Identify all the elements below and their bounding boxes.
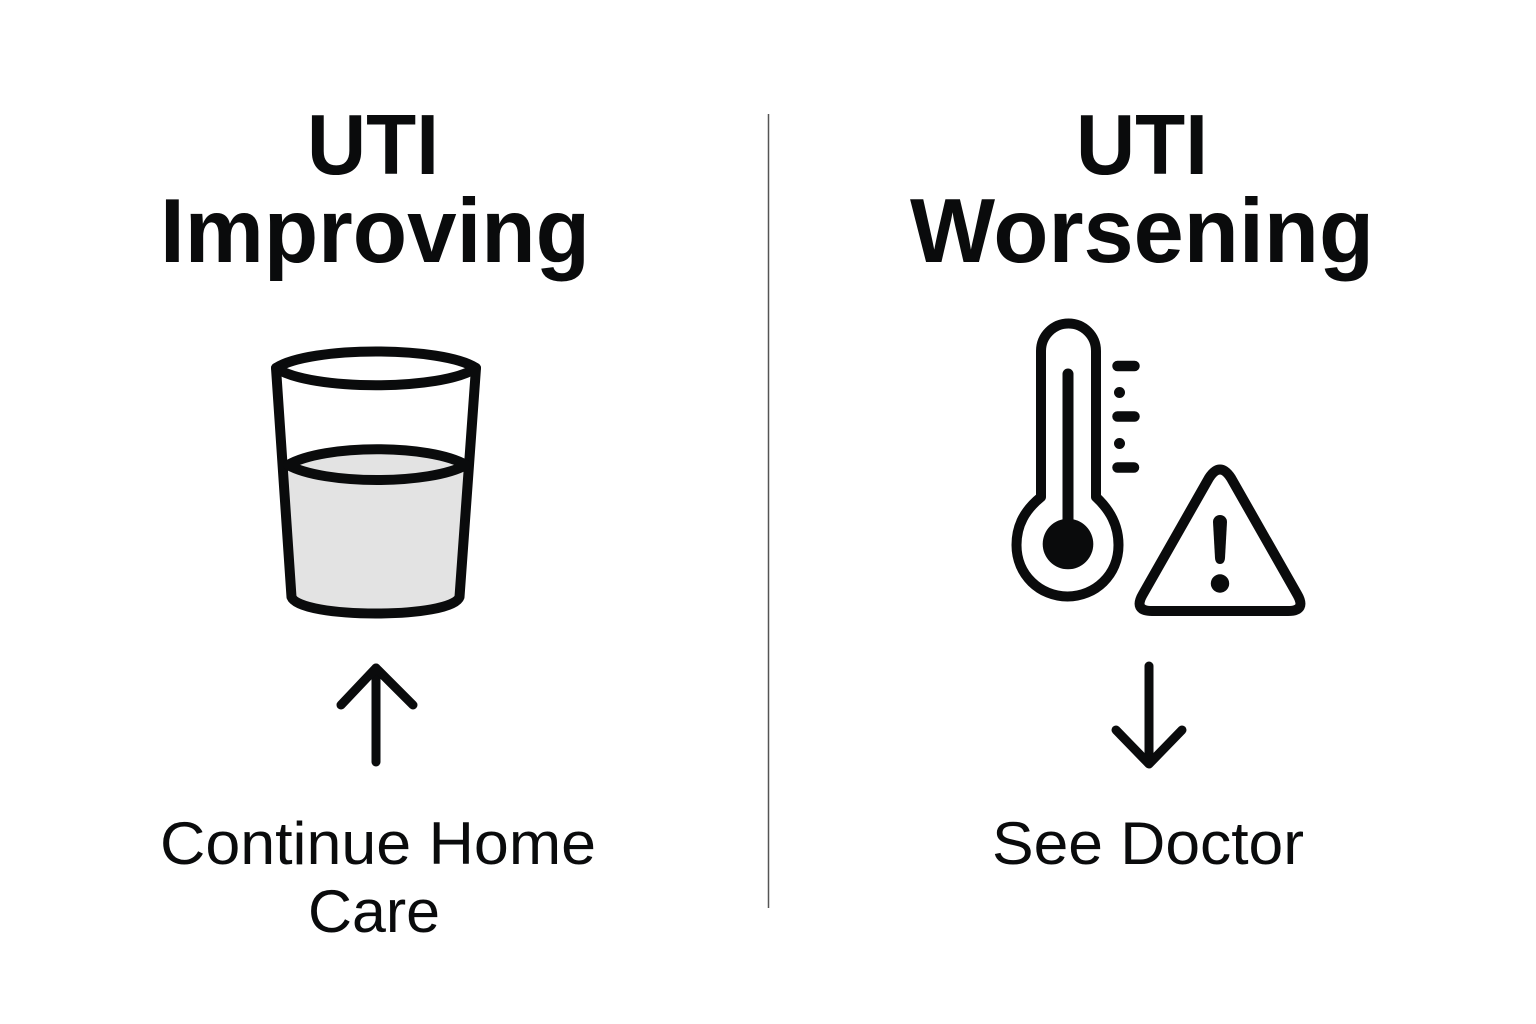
heading: UTI Improving [160,98,590,282]
panel: UTI worsening [910,98,1374,877]
heading: UTI Worsening [910,98,1374,282]
text: Continue Home Care: Care [308,878,440,945]
heading: UTI Improving: UTI [307,98,439,193]
icon: warning triangle [1140,470,1300,611]
text: See Doctor: See Doctor [992,810,1304,877]
text: Continue Home Care [160,810,596,945]
icon: glass of water [276,352,476,614]
heading: UTI Worsening: UTI [1076,98,1208,193]
icon: thermometer [1016,323,1134,596]
arrow: up [341,668,413,762]
arrow: down [1116,666,1182,764]
heading: UTI Worsening: Worsening [910,181,1374,282]
heading: UTI Improving: Improving [160,181,590,282]
panel: UTI improving [160,98,596,945]
text: Continue Home Care: Continue Home [160,810,596,877]
